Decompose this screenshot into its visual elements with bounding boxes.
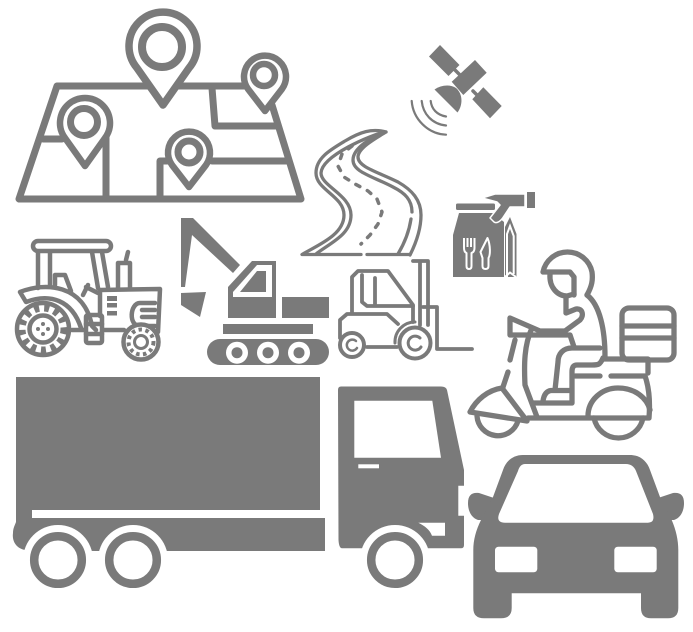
bucket bbox=[181, 292, 206, 317]
icon: truck bbox=[13, 377, 464, 595]
icon: tractor bbox=[15, 241, 160, 361]
windshield bbox=[498, 464, 653, 523]
cab bbox=[338, 386, 464, 548]
pin: large top bbox=[129, 12, 197, 105]
icon: excavator bbox=[181, 218, 329, 365]
rider body bbox=[510, 295, 605, 403]
fork and knife bbox=[464, 238, 490, 269]
icon: car front view bbox=[468, 455, 684, 618]
headlights bbox=[495, 547, 537, 572]
pin: top right bbox=[244, 56, 286, 111]
mirrors bbox=[468, 493, 494, 520]
icon: map with location pins bbox=[19, 12, 301, 199]
small front wheel bbox=[122, 323, 160, 361]
icon: winding road bbox=[302, 130, 421, 255]
bag side gusset bbox=[505, 217, 516, 277]
arm bbox=[181, 218, 240, 287]
icon: forklift bbox=[340, 261, 472, 358]
scooter frame bbox=[470, 328, 650, 438]
hand holding bag bbox=[482, 194, 525, 223]
bag body bbox=[453, 213, 504, 277]
body bbox=[473, 455, 678, 618]
front wheel bbox=[371, 536, 419, 584]
trailer bbox=[13, 377, 325, 551]
large rear wheel bbox=[15, 301, 71, 357]
pin: left bbox=[60, 98, 110, 166]
icon: satellite bbox=[412, 45, 502, 135]
delivery box bbox=[622, 308, 674, 360]
cab bbox=[228, 261, 276, 318]
icon: food delivery bag bbox=[453, 192, 535, 277]
map outline and streets bbox=[19, 86, 301, 199]
tracks bbox=[207, 339, 329, 365]
helmet and head bbox=[543, 252, 592, 296]
icon: delivery scooter rider bbox=[470, 252, 674, 438]
rear wheels bbox=[34, 536, 157, 584]
pin: centre bbox=[168, 132, 210, 187]
